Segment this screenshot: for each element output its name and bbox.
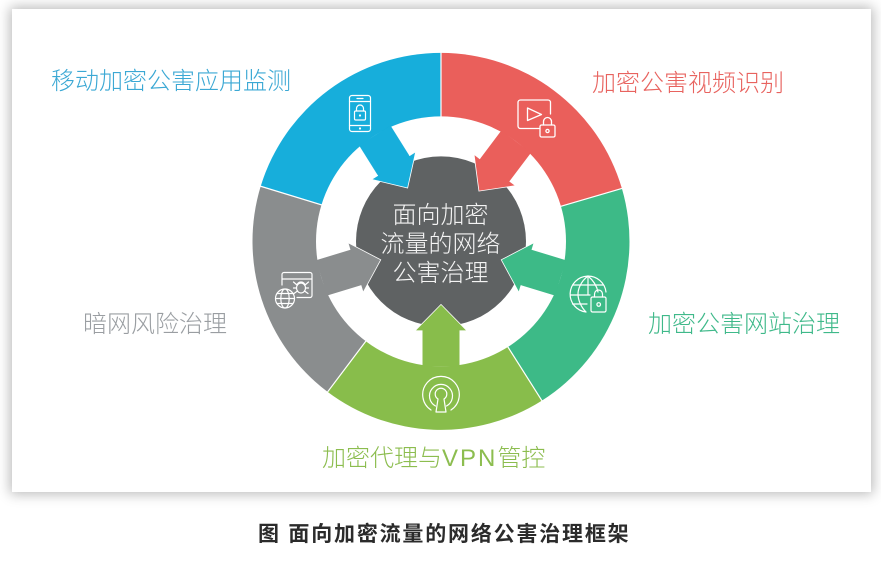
icon: video lock <box>518 100 555 137</box>
arrow: green <box>415 304 467 366</box>
arrow: gray <box>314 235 388 303</box>
arrow: blue <box>353 122 430 202</box>
centre title: 公害治理 <box>392 260 488 287</box>
centre title: 面向加密 <box>392 202 488 229</box>
segment dividers <box>260 52 623 401</box>
centre title <box>380 202 500 287</box>
label: dark web: 暗网风险治理 <box>83 311 227 338</box>
segment: mobile monitoring blue <box>261 53 441 241</box>
label: website governance: 加密公害网站治理 <box>648 311 840 338</box>
icon: globe lock <box>570 276 606 312</box>
segment: proxy green <box>328 241 542 430</box>
label: video recognition: 加密公害视频识别 <box>592 70 784 97</box>
icon: phone lock <box>350 96 370 132</box>
arrow: red <box>458 126 537 207</box>
label: mobile monitoring: 移动加密公害应用监测 <box>51 68 291 95</box>
caption: 图 面向加密流量的网络公害治理框架 <box>258 523 630 546</box>
centre disc <box>356 156 526 326</box>
centre title: 流量的网络 <box>380 231 500 258</box>
white ring <box>316 116 566 366</box>
segment: dark web gray <box>252 186 441 392</box>
icon: keyhole signal <box>423 376 459 412</box>
segment: video red <box>441 53 622 241</box>
label: proxy VPN: 加密代理与VPN管控 <box>322 445 545 472</box>
arrow: teal <box>494 235 568 303</box>
segment: website teal <box>441 188 629 401</box>
icon: window bug globe <box>276 272 312 308</box>
